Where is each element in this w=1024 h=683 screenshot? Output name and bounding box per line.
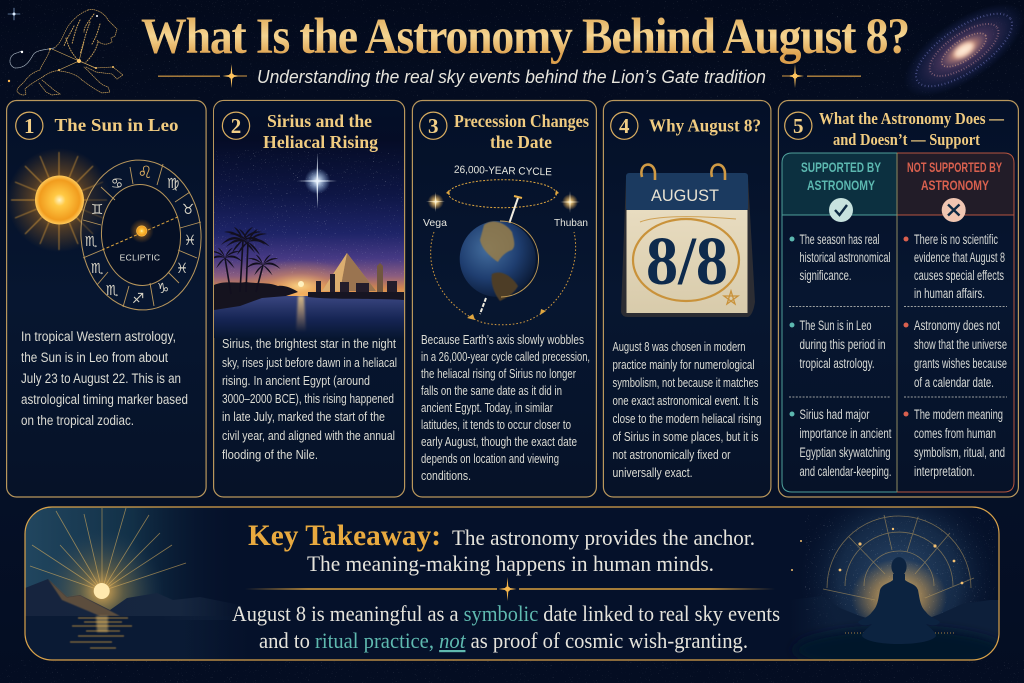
not supported item 3: interpretation. — [914, 464, 975, 479]
pyramid and temple — [308, 253, 404, 300]
number badge 3 — [420, 112, 447, 139]
icon: calendar page 8/8 — [621, 165, 755, 317]
supported item 3: Egyptian skywatching — [800, 445, 890, 460]
supported item 1: significance. — [800, 268, 852, 283]
not supported item 2: of a calendar date. — [914, 375, 994, 390]
star: Vega: Vega — [423, 217, 447, 229]
zodiac glyphs: ♉ — [182, 202, 194, 218]
text block — [421, 333, 590, 483]
zodiac glyphs: ♋ — [111, 176, 123, 192]
heading: Why August 8? — [649, 116, 761, 136]
supported item 1: historical astronomical — [800, 250, 890, 265]
zodiac glyphs: ♌ — [137, 163, 153, 183]
palm trees — [207, 227, 298, 310]
number badge 1: 1 — [24, 114, 35, 138]
heading: Sirius and the — [267, 111, 372, 131]
text block: July 23 to August 22. This is an — [21, 371, 181, 386]
zodiac glyphs: ♑ — [157, 281, 169, 297]
month label: AUGUST — [651, 186, 719, 205]
zodiac glyphs: ♓ — [176, 261, 188, 277]
text block: In tropical Western astrology, — [21, 329, 176, 344]
illustration: meditating figure — [791, 508, 998, 647]
title: What Is the Astronomy Behind August 8? — [141, 9, 909, 65]
number badge 4: 4 — [619, 114, 630, 138]
supported item 2: during this period in — [800, 337, 886, 352]
precession orbit ellipse — [446, 180, 559, 208]
illustration: Egyptian dawn scene — [207, 101, 404, 338]
text block: symbolism, not because it matches — [612, 376, 758, 390]
column: supported by astronomy — [782, 153, 897, 492]
heading: What the Astronomy Does — — [819, 109, 1004, 128]
column header — [907, 159, 1002, 193]
zodiac glyphs: ♍ — [167, 176, 179, 192]
text block: falls on the same date as it did in — [421, 384, 562, 398]
supported item 2: The Sun is in Leo — [800, 318, 872, 333]
column header: ASTRONOMY — [807, 177, 875, 193]
text block: ancient Egypt. Today, in similar — [421, 401, 553, 415]
takeaway headline: The astronomy provides the anchor. — [452, 525, 755, 550]
supported item 1: The season has real — [800, 232, 880, 247]
takeaway headline — [248, 519, 755, 576]
text block: civil year, and aligned with the annual — [222, 428, 395, 443]
zodiac glyphs: ♏ — [91, 261, 104, 277]
takeaway statement: August 8 is meaningful as a symbolic date linked to real sky events — [232, 601, 780, 626]
supported item 1 — [790, 232, 890, 283]
zodiac glyphs: ♐ — [132, 291, 144, 307]
text block: rising. In ancient Egypt (around — [222, 373, 370, 388]
not supported item 1 — [904, 232, 1005, 301]
panel: key takeaway — [24, 506, 1000, 661]
takeaway headline: The meaning-making happens in human minds. — [307, 551, 714, 576]
zodiac glyphs: ♊ — [91, 202, 103, 218]
zodiac glyphs: ♏ — [106, 283, 119, 299]
text block — [21, 329, 188, 428]
diagram: zodiac wheel — [76, 156, 206, 314]
text block: on the tropical zodiac. — [21, 413, 134, 428]
not supported item 3 — [904, 407, 1005, 479]
star mark — [724, 291, 738, 304]
zodiac glyphs — [85, 163, 196, 307]
text block: early August, though the exact date — [421, 435, 577, 449]
cycle label: 26,000-YEAR CYCLE — [454, 164, 552, 178]
panel: Why August 8? — [603, 100, 771, 497]
text block: the Sun is in Leo from about — [21, 350, 168, 365]
takeaway statement: and to ritual practice, not as proof of cosmic wish-granting. — [259, 628, 748, 653]
date numerals: 8/8 — [646, 223, 728, 299]
panel: What the Astronomy Does and Doesn't Support — [778, 100, 1018, 497]
ecliptic label: ECLIPTIC — [120, 252, 160, 262]
subtitle ornament: right star rule — [782, 64, 861, 88]
supported item 2 — [790, 318, 886, 371]
text block: the heliacal rising of Sirius no longer — [421, 367, 576, 381]
takeaway headline: Key Takeaway: — [248, 519, 441, 552]
heading: The Sun in Leo — [54, 115, 178, 135]
icon: glowing sun — [7, 148, 111, 252]
text block: practice mainly for numerological — [612, 358, 754, 372]
panel: Sirius and the Heliacal Rising — [207, 100, 405, 497]
star: Vega — [423, 192, 447, 229]
text block: conditions. — [421, 469, 471, 483]
icon: cross mark — [942, 198, 966, 222]
text block: sky, rises just before dawn in a heliacal — [222, 355, 397, 370]
supported item 3 — [790, 407, 892, 479]
text block — [612, 340, 762, 480]
zodiac glyphs: ♏ — [85, 234, 98, 250]
illustration: sunrise over mountains — [26, 508, 225, 659]
heading — [819, 109, 1004, 149]
text block — [222, 336, 397, 462]
heading: Precession Changes — [454, 111, 589, 131]
subtitle ornament: left star rule — [158, 64, 247, 88]
column: not supported by astronomy — [897, 153, 1014, 492]
text block: in late July, marked the start of the — [222, 409, 385, 424]
large precession arc — [431, 232, 576, 325]
center sun — [130, 219, 154, 243]
divider with star — [245, 577, 775, 601]
text block: close to the modern heliacal rising — [612, 412, 762, 426]
supported item 3: and calendar-keeping. — [800, 464, 892, 479]
number badge 2 — [222, 112, 250, 139]
star: Thuban — [554, 191, 588, 229]
number badge 4 — [611, 112, 638, 139]
heading — [263, 111, 378, 152]
number badge 2: 2 — [231, 114, 241, 138]
supported item 3: Sirius had major — [800, 407, 870, 422]
text block: in a 26,000-year cycle called precession, — [421, 350, 590, 364]
icon: Sirius star — [297, 153, 337, 209]
text block: of Sirius in some places, but it is — [612, 430, 758, 444]
supported item 2: tropical astrology. — [800, 356, 874, 371]
text block: Because Earth’s axis slowly wobbles — [421, 333, 584, 347]
text block: astrological timing marker based — [21, 392, 188, 407]
takeaway statement — [232, 601, 780, 653]
text block: flooding of the Nile. — [222, 447, 318, 462]
star: Thuban: Thuban — [554, 217, 588, 229]
heading — [454, 111, 589, 152]
text block: one exact astronomical event. It is — [612, 394, 758, 408]
text block: depends on location and viewing — [421, 452, 559, 466]
hand-drawn circle — [633, 217, 739, 301]
zodiac glyphs: ♓ — [184, 233, 196, 249]
number badge 5 — [785, 112, 812, 139]
text block: not astronomically fixed or — [612, 448, 730, 462]
icon: check mark — [829, 198, 853, 222]
column header: SUPPORTED BY — [801, 159, 881, 175]
text block: Sirius, the brightest star in the night — [222, 336, 396, 351]
sun reflection on river — [296, 296, 306, 332]
text block: latitudes, it tends to occur closer to — [421, 418, 571, 432]
number badge 5: 5 — [793, 114, 804, 138]
ecliptic line — [102, 216, 180, 250]
icon: spiral galaxy — [889, 0, 1024, 114]
number badge 3: 3 — [428, 114, 439, 138]
subtitle: Understanding the real sky events behind the Lion’s Gate tradition — [257, 67, 766, 87]
icon: Earth with tilted axis — [460, 196, 539, 314]
text block: 3000–2000 BCE), this rising happened — [222, 391, 394, 406]
text block: August 8 was chosen in modern — [612, 340, 746, 354]
column header: ASTRONOMY — [921, 177, 989, 193]
heading: and Doesn’t — Support — [833, 130, 980, 149]
number badge 1 — [16, 112, 43, 139]
not supported item 1: in human affairs. — [914, 286, 985, 301]
text block: universally exact. — [612, 466, 692, 480]
not supported item 2 — [904, 318, 1007, 390]
supported item 3: importance in ancient — [800, 426, 892, 441]
heading: Heliacal Rising — [263, 132, 378, 152]
panel: Precession Changes the Date — [412, 100, 596, 497]
panel: The Sun in Leo — [7, 100, 206, 497]
column header — [801, 159, 881, 193]
icon: lion constellation — [8, 8, 123, 95]
heading: the Date — [490, 132, 552, 152]
